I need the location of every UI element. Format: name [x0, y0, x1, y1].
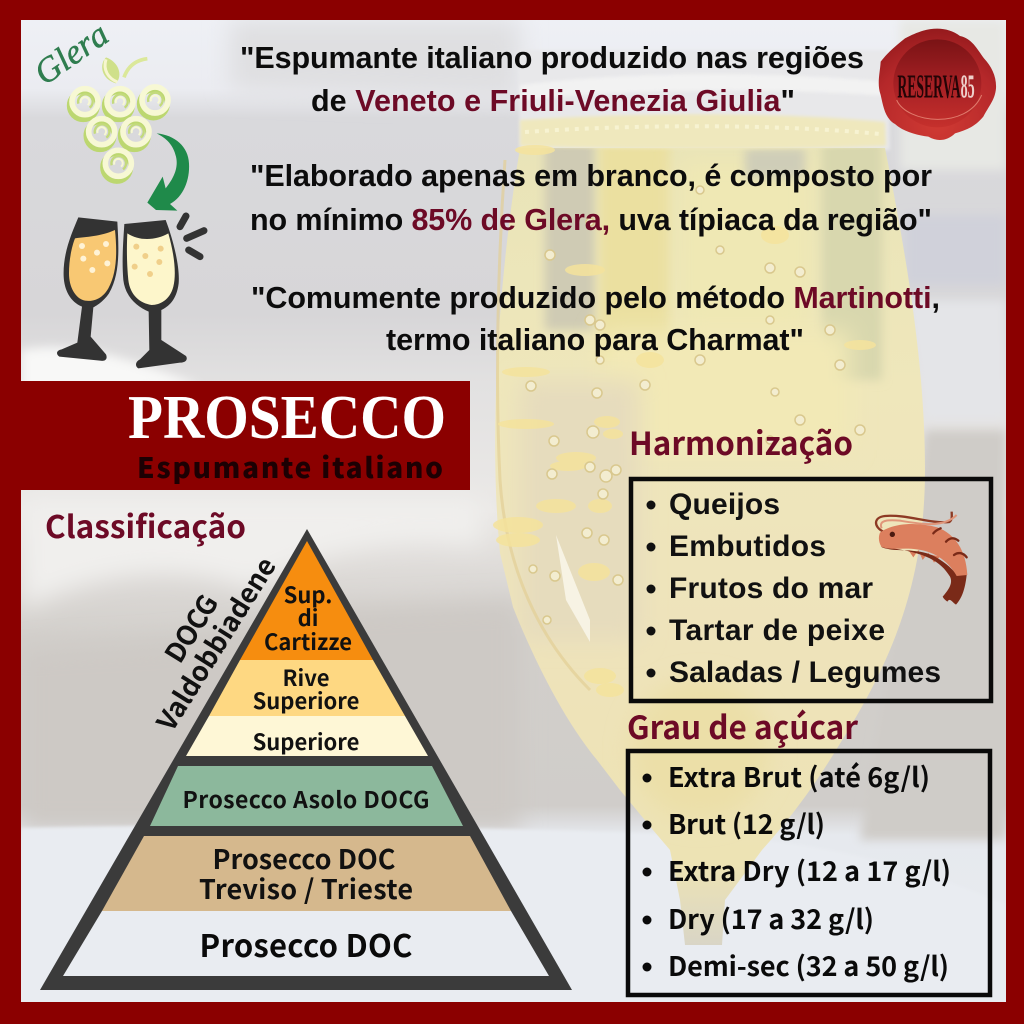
- tier: Rive Superiore: [209, 660, 405, 716]
- arrow: [147, 133, 189, 211]
- quote 1: de Veneto e Friuli-Venezia Giulia": [311, 84, 795, 118]
- panel: sugar levels list: [628, 751, 990, 995]
- illustration: grapes, arrow and glasses: [27, 15, 204, 368]
- panel: sugar levels list: Dry (17 a 32 g/l): [668, 898, 874, 937]
- icon: grape cluster: [69, 57, 168, 181]
- panel: pairing list: Embutidos: [669, 530, 826, 563]
- panel: sugar levels list: Extra Dry (12 a 17 g/l): [668, 850, 951, 889]
- panel: pairing list: [631, 479, 991, 701]
- quote 3: [251, 281, 940, 357]
- tier: Sup. di Cartizze: [240, 541, 373, 660]
- tier: Sup. di Cartizze: di: [298, 601, 318, 633]
- label: Glera: Glera: [27, 15, 115, 93]
- panel: pairing list: Tartar de peixe: [669, 614, 885, 647]
- panel: sugar levels list: Brut (12 g/l): [668, 803, 825, 842]
- quote 2: no mínimo 85% de Glera, uva típiaca da região": [250, 203, 932, 237]
- panel: pairing list: Frutos do mar: [669, 572, 873, 605]
- icon: shrimp: [876, 512, 967, 605]
- glass of sparkling wine: [493, 50, 925, 945]
- heading: Harmonização: Harmonização: [629, 419, 853, 465]
- heading: PROSECCO: PROSECCO: [128, 384, 446, 452]
- panel: pairing list: Saladas / Legumes: [669, 656, 941, 689]
- tier: Rive Superiore: Superiore: [253, 684, 359, 716]
- icon: toasting glasses: [57, 216, 204, 368]
- quote 3: "Comumente produzido pelo método Martinotti,: [251, 281, 940, 315]
- icon: wax seal logo: [879, 29, 996, 140]
- quote 1: "Espumante italiano produzido nas regiões: [240, 41, 864, 75]
- panel: sugar levels list: Demi-sec (32 a 50 g/l): [668, 945, 949, 984]
- label: DOCG Valdobbiadene: DOCG: [154, 586, 226, 669]
- panel: pairing list: Queijos: [669, 488, 780, 521]
- icon: wax seal logo: 85: [961, 68, 975, 105]
- subheading: Espumante italiano: [137, 447, 443, 487]
- heading: Grau de açúcar: Grau de açúcar: [627, 703, 858, 749]
- quote 2: "Elaborado apenas em branco, é composto por: [250, 159, 932, 193]
- tier: Rive Superiore: Rive: [283, 661, 329, 693]
- pyramid chart: [40, 529, 572, 990]
- tier: Superiore: Superiore: [253, 725, 359, 757]
- tier: Prosecco Asolo DOCG: [150, 766, 463, 826]
- tier: Prosecco DOC: [63, 911, 549, 976]
- heading: Classificação: Classificação: [45, 502, 246, 547]
- tier: Sup. di Cartizze: Cartizze: [264, 625, 352, 657]
- tier: Sup. di Cartizze: Sup.: [284, 578, 332, 610]
- tier: Prosecco DOC Treviso / Trieste: Treviso / Trieste: [199, 868, 413, 907]
- tier: Prosecco DOC: Prosecco DOC: [200, 921, 412, 966]
- quote block: [240, 41, 940, 357]
- tier: Prosecco Asolo DOCG: Prosecco Asolo DOCG: [182, 781, 430, 815]
- tier: Superiore: [186, 716, 428, 757]
- label: DOCG Valdobbiadene: Valdobbiadene: [145, 549, 284, 738]
- tier: Prosecco DOC Treviso / Trieste: [102, 836, 511, 911]
- banner: title: [21, 381, 470, 490]
- tier: Prosecco DOC Treviso / Trieste: Prosecco DOC: [212, 838, 396, 877]
- quote 1: [240, 41, 864, 118]
- quote 3: termo italiano para Charmat": [386, 323, 804, 357]
- panel: sugar levels list: Extra Brut (até 6g/l): [668, 756, 930, 795]
- quote 2: [250, 159, 932, 237]
